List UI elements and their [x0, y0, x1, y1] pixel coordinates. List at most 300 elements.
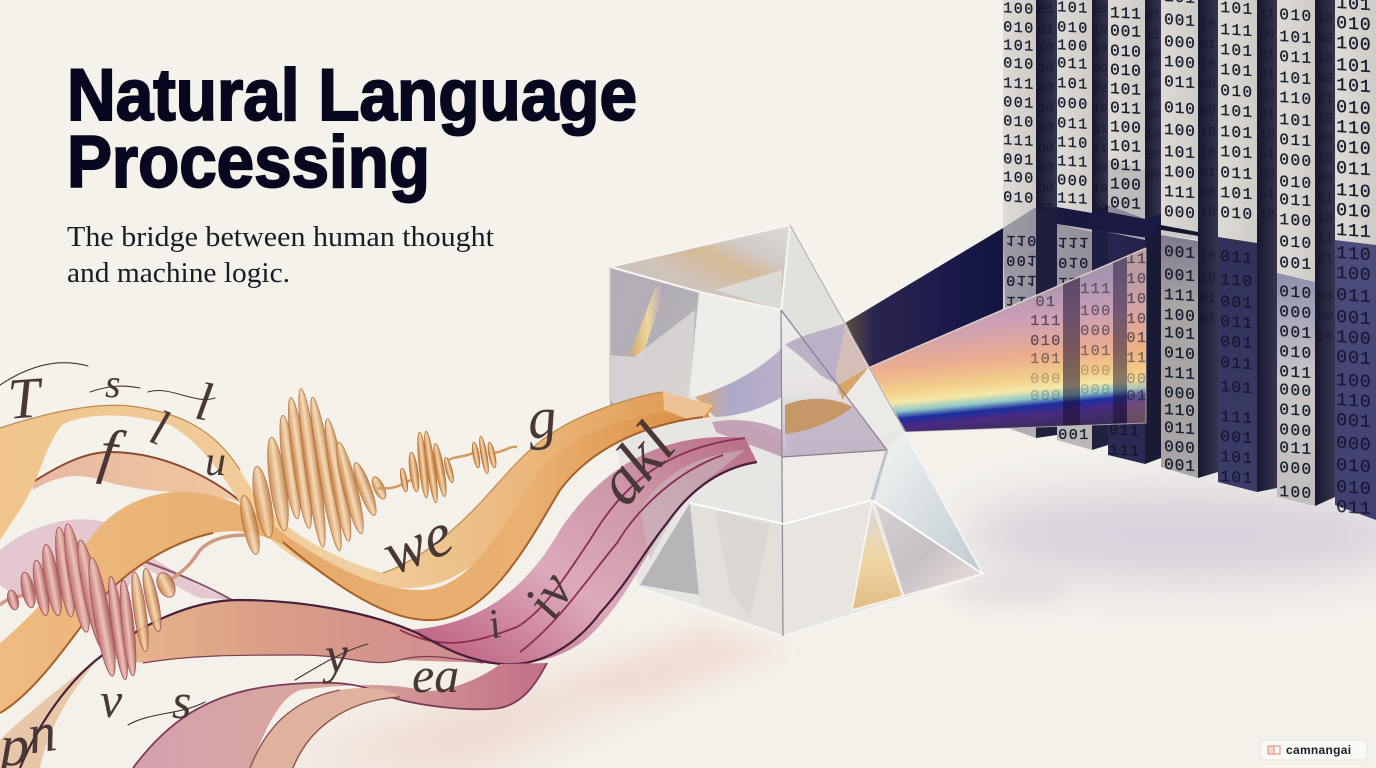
column 4: 10	[1200, 144, 1216, 161]
column 4: 100	[1164, 163, 1196, 183]
ribbon: lower salmon edge	[143, 655, 483, 663]
column 6: 011	[1279, 131, 1313, 151]
title: Natural Language	[67, 55, 637, 136]
column 5: 111	[1220, 21, 1254, 41]
column 2: 111	[1057, 153, 1089, 172]
column 5: 010	[1220, 204, 1254, 224]
column 3: 101	[1110, 137, 1142, 157]
column 4: 011	[1164, 419, 1196, 439]
column 6: 100	[1279, 211, 1313, 231]
column 4: 01	[1200, 310, 1216, 327]
subtitle: The bridge between human thought	[67, 221, 494, 253]
calligraphy letters: l	[143, 399, 176, 456]
column 2: 10	[1093, 42, 1107, 56]
calligraphy letters: iv	[512, 562, 586, 629]
rainbow beam	[868, 240, 1148, 432]
column 7: 110	[1336, 181, 1372, 203]
column 3: 00	[1146, 108, 1160, 122]
column 5: 011	[1220, 248, 1254, 268]
prism: amber triangle	[852, 505, 903, 610]
column 5: 01	[1259, 46, 1275, 63]
rainbow beam: 100	[1080, 303, 1112, 320]
column 5: 101	[1220, 143, 1254, 163]
rainbow beam: 111	[1080, 281, 1112, 298]
ribbon: pink band	[410, 437, 757, 664]
calligraphy letters: u	[205, 439, 226, 485]
column 6: 000	[1279, 303, 1313, 323]
column 2: 010	[1057, 19, 1089, 38]
column 6: 100	[1279, 483, 1313, 503]
rainbow beam: 10	[1126, 271, 1148, 288]
column 7: 010	[1336, 478, 1372, 500]
column 4: 01	[1200, 290, 1216, 307]
column 7: 010	[1336, 138, 1372, 160]
prism: middle strip	[782, 450, 887, 522]
prism: refracted ribbon	[695, 348, 782, 417]
column 6: 000	[1279, 459, 1313, 479]
column 2: 111	[1058, 233, 1090, 250]
column 1: 01	[1038, 200, 1054, 217]
column 6: 011	[1279, 191, 1313, 211]
prism: facet mark	[715, 510, 770, 620]
column 6: 000	[1279, 151, 1313, 171]
prism: edge highlights	[610, 225, 983, 636]
ribbon: far pale pink	[0, 519, 235, 620]
column 5: 01	[1259, 186, 1275, 203]
dark upper light beam	[845, 205, 1161, 368]
column 2: 10	[1093, 182, 1107, 196]
column 4: 00	[1200, 184, 1216, 201]
prism: right lower panel	[783, 500, 872, 636]
column 7: 110	[1336, 391, 1372, 413]
column 2: 011	[1057, 115, 1089, 134]
rainbow beam: 10	[1126, 291, 1148, 308]
column 7: 001	[1336, 348, 1372, 370]
column 7: 010	[1336, 98, 1372, 120]
column 1: 010	[1003, 189, 1035, 208]
calligraphy letters: n	[24, 701, 60, 766]
column 5: 001	[1220, 333, 1254, 353]
column 4: 00	[1200, 102, 1216, 119]
column 1: 100	[1003, 0, 1035, 19]
column 4: 100	[1164, 306, 1196, 326]
column 6: 011	[1279, 48, 1313, 68]
rainbow beam: 11	[1126, 350, 1148, 367]
title	[67, 55, 637, 203]
ribbon: lower pink edge	[133, 663, 547, 768]
rainbow beam: 000	[1080, 323, 1112, 340]
glass prism	[610, 225, 983, 636]
column 2: 01	[1093, 122, 1107, 136]
column 5: 00	[1259, 26, 1275, 43]
column 4: 011	[1164, 73, 1196, 93]
watermark badge	[1260, 740, 1367, 760]
column 6: 101	[1279, 28, 1313, 48]
rainbow beam: 000	[1080, 363, 1112, 380]
ribbon: orange tip	[663, 392, 713, 420]
calligraphy letters: g	[524, 384, 560, 452]
column 1: 10	[1038, 60, 1054, 77]
ribbon: magenta edges	[400, 438, 745, 652]
column 5: 101	[1220, 468, 1254, 488]
column 7: 100	[1336, 264, 1372, 286]
column 5: 18	[1259, 206, 1275, 223]
column 1: 010	[1003, 113, 1035, 132]
column 1: 111	[1003, 132, 1035, 151]
column 7: 010	[1336, 201, 1372, 223]
column 5: 01	[1259, 106, 1275, 123]
rainbow beam: 01	[1126, 388, 1148, 405]
column 1: 010	[1003, 55, 1035, 74]
column 4: 001	[1164, 243, 1196, 263]
rainbow beam: 101	[1030, 351, 1062, 368]
column 7: 001	[1336, 308, 1372, 330]
column 5: 101	[1220, 123, 1254, 143]
data columns of binary digits	[1003, 0, 1376, 520]
column 4: 10	[1200, 124, 1216, 141]
column 6: 001	[1279, 323, 1313, 343]
flowing language ribbons	[0, 392, 757, 768]
prism: left facet shard	[610, 310, 695, 430]
column 1: 00	[1038, 160, 1054, 177]
column 4: 00	[1200, 76, 1216, 93]
rainbow beam: 01	[1035, 294, 1057, 311]
column 6: 00	[1317, 30, 1333, 47]
column 2: 110	[1057, 134, 1089, 153]
column 6	[1277, 0, 1335, 506]
ribbon: lower pink band	[133, 663, 547, 768]
orange sound wave coil	[237, 388, 389, 556]
column 6: 00	[1317, 130, 1333, 147]
prism: lilac exit band	[785, 323, 846, 385]
column 3: 10	[1146, 128, 1160, 142]
column 3: 00	[1146, 48, 1160, 62]
column 2: 00	[1093, 62, 1107, 76]
column 1: 111	[1003, 75, 1035, 94]
column 5: 101	[1220, 448, 1254, 468]
column 1: 10	[1038, 100, 1054, 117]
column 4: 111	[1164, 286, 1196, 306]
column 7	[1335, 0, 1376, 520]
prism: lilac refraction	[785, 407, 887, 456]
column 6: 010	[1279, 343, 1313, 363]
column 3: 101	[1110, 80, 1142, 100]
column 6: 000	[1279, 421, 1313, 441]
calligraphy letters: s	[105, 361, 121, 406]
rainbow beam: 11	[1126, 251, 1148, 268]
column 4: 10	[1200, 248, 1216, 265]
rainbow beam: 101	[1080, 343, 1112, 360]
ribbon: orange edges	[0, 417, 703, 713]
column 1	[1003, 0, 1057, 438]
column 3: 011	[1110, 156, 1142, 176]
column 1: 001	[1003, 151, 1035, 170]
column 2: 010	[1058, 253, 1090, 270]
calligraphy letters: y	[318, 626, 351, 685]
column 7: 011	[1336, 498, 1372, 520]
calligraphy letters: v	[100, 672, 123, 728]
column 7: 101	[1336, 56, 1372, 78]
floor shadows	[250, 490, 1376, 768]
subtitle	[67, 221, 494, 289]
rainbow beam: 000	[1030, 388, 1062, 405]
column 4: 10	[1200, 270, 1216, 287]
column 7: 100	[1336, 328, 1372, 350]
column 3: 111	[1109, 442, 1141, 461]
small right wave coil	[378, 431, 517, 503]
column 3: 00	[1146, 168, 1160, 182]
column 5: 01	[1259, 66, 1275, 83]
column 5: 110	[1220, 271, 1254, 291]
rainbow beam: 10	[1126, 311, 1148, 328]
column 6: 10	[1317, 210, 1333, 227]
column 3: 001	[1110, 194, 1142, 214]
column 1: 00	[1038, 140, 1054, 157]
ribbon: peach band edge	[33, 452, 245, 505]
column 3: 011	[1109, 422, 1141, 441]
column 2: 011	[1057, 55, 1089, 74]
ribbon: peach band	[33, 452, 245, 505]
column 6: 011	[1279, 363, 1313, 383]
column 1: 00	[1038, 80, 1054, 97]
column 2: 111	[1058, 273, 1090, 290]
column 6: 110	[1279, 89, 1313, 109]
column 2: 00	[1093, 162, 1107, 176]
column 6: 101	[1279, 111, 1313, 131]
column 3: 010	[1110, 42, 1142, 62]
prism: pink inner fold	[712, 420, 782, 457]
column 3: 100	[1110, 175, 1142, 195]
ribbon: lavender fold	[640, 450, 745, 560]
pink sound wave coil	[0, 522, 245, 680]
ribbon: low left peach	[0, 657, 100, 768]
column 6: 010	[1279, 173, 1313, 193]
column 2: 00	[1093, 3, 1107, 17]
column 5	[1218, 0, 1277, 492]
column 7: 010	[1336, 456, 1372, 478]
column 6: 00	[1317, 308, 1333, 325]
calligraphy letters: ea	[412, 647, 459, 703]
prism: amber refraction	[785, 399, 853, 434]
column 1: 00	[1038, 180, 1054, 197]
column 4: 001	[1164, 266, 1196, 286]
prism: lower centre panel	[690, 503, 784, 636]
column 6: 010	[1279, 6, 1313, 26]
prism: lilac triangle	[876, 505, 981, 597]
column 1: 01	[1038, 1, 1054, 18]
column 2: 10	[1093, 102, 1107, 116]
column 6: 101	[1279, 69, 1313, 89]
rainbow beam: 111	[1030, 313, 1062, 330]
column 6: 00	[1317, 170, 1333, 187]
column 2: 100	[1057, 37, 1089, 56]
column 5: 101	[1220, 378, 1254, 398]
column 2: 00	[1093, 202, 1107, 216]
column 5: 101	[1220, 41, 1254, 61]
column 4: 01	[1200, 164, 1216, 181]
column 5: 00	[1259, 166, 1275, 183]
rainbow beam: 010	[1030, 333, 1062, 350]
column 3: 10	[1146, 68, 1160, 82]
column 7: 100	[1336, 34, 1372, 56]
ribbon: salmon band	[100, 600, 490, 663]
ribbon: top edge	[0, 392, 663, 573]
column 6: 10	[1317, 110, 1333, 127]
column 6: 010	[1279, 401, 1313, 421]
column 6: 10	[1317, 10, 1333, 27]
column 3: 11	[1146, 28, 1160, 42]
ribbon: bottom salmon edge	[250, 690, 400, 768]
column 6: 11	[1317, 230, 1333, 247]
column 6: 000	[1279, 381, 1313, 401]
column 1: 010	[1003, 19, 1035, 38]
column 3: 00	[1146, 88, 1160, 102]
column 4: 001	[1164, 11, 1196, 31]
column 1: 100	[1003, 169, 1035, 188]
prism: inner triangle	[781, 310, 887, 457]
column 5: 00	[1259, 86, 1275, 103]
column 6: 00	[1317, 70, 1333, 87]
column 4: 110	[1164, 401, 1196, 421]
column 5: 101	[1220, 102, 1254, 122]
ribbon: dark lead edge	[20, 462, 757, 768]
column 4: 10	[1200, 204, 1216, 221]
prism: centre upper panel	[690, 292, 782, 440]
column 3: 01	[1146, 8, 1160, 22]
prism: iridescent streak	[630, 285, 666, 355]
column 1: 01	[1038, 21, 1054, 38]
calligraphy letters: T	[6, 364, 46, 432]
column 3: 001	[1110, 22, 1142, 42]
rainbow beam: 000	[1030, 371, 1062, 388]
column 3: 100	[1110, 118, 1142, 138]
column 1: 10	[1038, 40, 1054, 57]
column 7: 100	[1336, 371, 1372, 393]
column 4: 111	[1164, 364, 1196, 384]
column 6: 10	[1317, 328, 1333, 345]
column 4: 010	[1164, 99, 1196, 119]
column 6: 01	[1317, 250, 1333, 267]
column 5: 111	[1220, 408, 1254, 428]
column 7: 001	[1336, 411, 1372, 433]
column 1: 110	[1006, 231, 1038, 248]
column 6: 010	[1279, 233, 1313, 253]
calligraphy letters: we	[373, 500, 462, 588]
column 4: 001	[1164, 456, 1196, 476]
column 6: 01	[1317, 190, 1333, 207]
column 2: 101	[1057, 75, 1089, 94]
column 3: 011	[1110, 99, 1142, 119]
column 5: 010	[1220, 82, 1254, 102]
column 1: 001	[1003, 94, 1035, 113]
prism: amber exit sliver	[838, 368, 868, 400]
column 2: 11	[1093, 142, 1107, 156]
column 4: 111	[1164, 183, 1196, 203]
column 5: 101	[1220, 61, 1254, 81]
prism: top inner shard	[715, 270, 782, 310]
column 7: 101	[1336, 76, 1372, 98]
column 4: 10	[1200, 16, 1216, 33]
column 4: 100	[1164, 53, 1196, 73]
column 5: 10	[1259, 126, 1275, 143]
column 2: 10	[1093, 23, 1107, 37]
column 5: 001	[1220, 293, 1254, 313]
column 6: 001	[1279, 254, 1313, 274]
prism: left face	[610, 267, 700, 430]
column 6: 10	[1317, 50, 1333, 67]
prism: base body	[610, 225, 983, 636]
column 3	[1108, 0, 1161, 464]
column 5: 101	[1220, 184, 1254, 204]
column 5: 11	[1259, 6, 1275, 23]
calligraphy letters: akl	[582, 410, 690, 518]
column 3: 00	[1146, 148, 1160, 162]
column 4: 10	[1200, 56, 1216, 73]
column 4: 010	[1164, 344, 1196, 364]
column 4: 101	[1164, 324, 1196, 344]
prism: pale right facet	[780, 225, 846, 345]
column 6: 01	[1317, 90, 1333, 107]
column 1: 001	[1006, 251, 1038, 268]
column 4: 100	[1164, 121, 1196, 141]
rainbow beam: 01	[1126, 330, 1148, 347]
column 5: 01	[1259, 146, 1275, 163]
column 6: 00	[1317, 288, 1333, 305]
column 7: 011	[1336, 286, 1372, 308]
column 4: 000	[1164, 384, 1196, 404]
column 7: 111	[1336, 221, 1372, 243]
ribbon: top orange loop	[0, 392, 713, 588]
column 7: 110	[1336, 244, 1372, 266]
column 3: 010	[1110, 61, 1142, 81]
ribbon: main orange band	[0, 408, 710, 713]
column 6: 011	[1279, 439, 1313, 459]
column 5: 011	[1220, 354, 1254, 374]
column 7: 110	[1336, 118, 1372, 140]
column 7: 010	[1336, 14, 1372, 36]
column 3: 111	[1110, 4, 1142, 24]
calligraphy letters: i	[483, 601, 506, 649]
column 2: 000	[1057, 172, 1089, 191]
column 2	[1057, 0, 1108, 450]
column 1: 101	[1003, 37, 1035, 56]
calligraphy letters	[0, 361, 690, 768]
prism: exit facet	[836, 323, 868, 395]
icon: open book	[1268, 746, 1280, 754]
column 2: 001	[1058, 427, 1090, 444]
column 6: 10	[1317, 150, 1333, 167]
ribbon: mauve thin edge	[140, 560, 232, 600]
watermark badge: camnangai	[1286, 743, 1351, 757]
prism: right upper face	[781, 225, 905, 457]
column 2: 02	[1093, 82, 1107, 96]
column 4: 000	[1164, 438, 1196, 458]
rainbow beam: 000	[1080, 382, 1112, 399]
column 1: 011	[1006, 271, 1038, 288]
calligraphy letters: l	[191, 371, 217, 433]
column 5: 011	[1220, 164, 1254, 184]
column 7: 011	[1336, 159, 1372, 181]
prism: top face	[610, 225, 790, 310]
title: Processing	[67, 122, 430, 203]
prism: lower left gray wedge	[640, 503, 700, 595]
column 4: 000	[1164, 203, 1196, 223]
ribbon: bottom salmon band	[250, 688, 400, 768]
rainbow beam: 00	[1126, 371, 1148, 388]
column 2: 000	[1057, 95, 1089, 114]
calligraphy letters: f	[95, 417, 129, 488]
prism: right strip	[876, 430, 983, 574]
